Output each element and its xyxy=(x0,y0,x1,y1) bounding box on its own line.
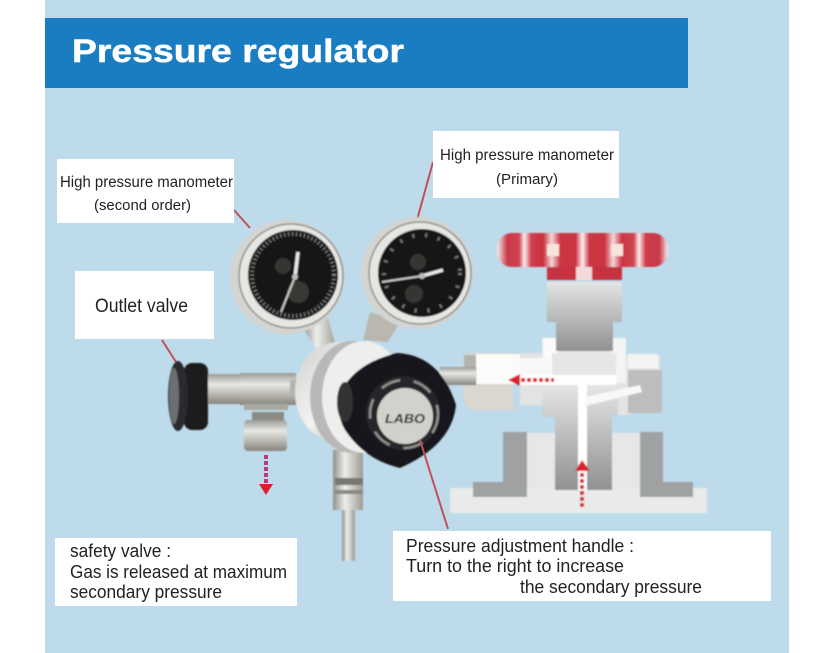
arrow: flow left xyxy=(508,374,554,386)
leader line: pressure adjustment handle xyxy=(420,440,448,529)
regulator body xyxy=(295,342,381,442)
label: outlet valve: Outlet valve xyxy=(95,296,188,317)
label: outlet valve xyxy=(75,271,214,339)
label: high pressure manometer second order xyxy=(57,159,234,223)
left L bracket xyxy=(473,432,527,497)
knob cap with logo xyxy=(377,388,433,444)
base plate xyxy=(450,488,707,513)
knob cap with logo: LABO xyxy=(385,411,425,426)
label: safety valve xyxy=(55,538,297,606)
valve cross-section diagram xyxy=(450,233,707,513)
label: safety valve: secondary pressure xyxy=(70,582,222,602)
label: high pressure manometer second order: High pressure manometer xyxy=(60,174,233,191)
label: pressure adjustment handle xyxy=(393,531,771,601)
outlet valve fittings xyxy=(206,374,240,404)
label: high pressure manometer primary: High pressure manometer xyxy=(440,147,614,164)
bottom outlet pipe xyxy=(342,510,355,561)
arrow: flow up xyxy=(575,460,590,507)
title banner xyxy=(45,18,688,88)
right L bracket xyxy=(640,432,693,497)
gauge: primary xyxy=(361,217,473,329)
hex outlet nut xyxy=(463,353,518,410)
gauge: second order xyxy=(230,220,344,334)
title: Pressure regulator xyxy=(72,33,404,69)
label: high pressure manometer primary: (Primary) xyxy=(496,171,558,188)
label: pressure adjustment handle: Turn to the right to increase xyxy=(406,556,624,576)
label: high pressure manometer second order: (second order) xyxy=(94,197,191,214)
arrow: safety valve release xyxy=(259,455,273,495)
red handle xyxy=(547,266,622,280)
right tube xyxy=(440,367,476,385)
label: safety valve: safety valve : xyxy=(70,541,171,561)
outlet valve knob xyxy=(184,363,208,430)
gauge stems xyxy=(303,318,337,355)
label: pressure adjustment handle: Pressure adjustment handle : xyxy=(406,536,634,556)
label: safety valve: Gas is released at maximum xyxy=(70,562,287,582)
black knob xyxy=(339,353,456,468)
label: pressure adjustment handle: the secondary pressure xyxy=(520,577,702,597)
label: high pressure manometer primary xyxy=(433,131,619,198)
valve body xyxy=(520,338,662,490)
channels xyxy=(520,375,616,385)
handle stem xyxy=(547,282,622,351)
regulator photo xyxy=(168,217,476,561)
leader lines xyxy=(162,162,433,362)
